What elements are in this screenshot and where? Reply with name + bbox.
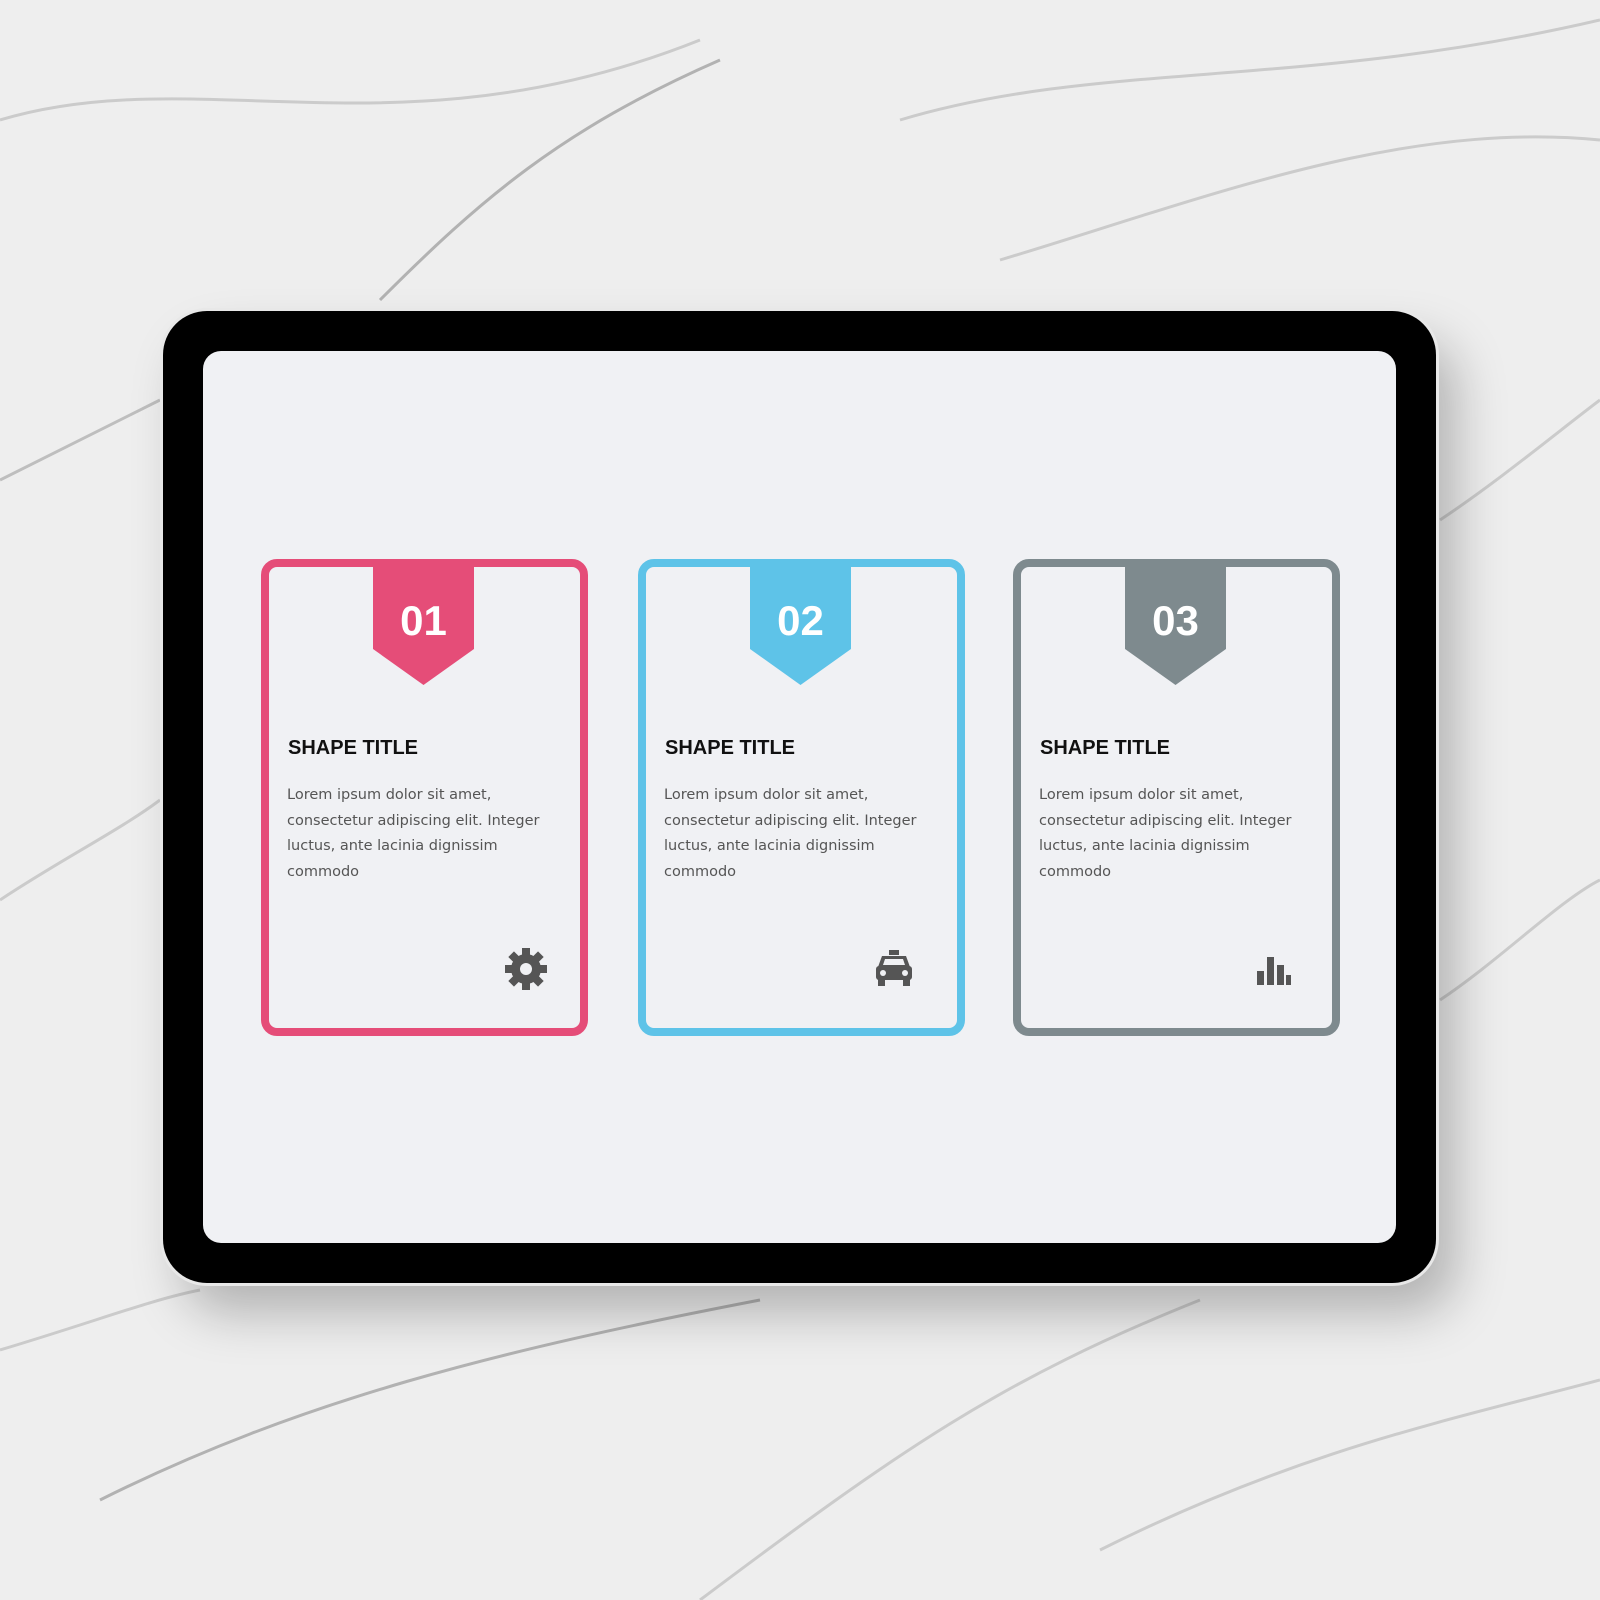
badge 01: 01 [400, 597, 447, 644]
badge 02: 02 [777, 597, 824, 644]
badge 01 [373, 567, 474, 685]
tablet [163, 311, 1436, 1283]
heading: SHAPE TITLE [288, 737, 418, 759]
text block: Lorem ipsum dolor sit amet, consectetur adipiscing elit. Integer luctus, ante lacinia dignissim commodo [287, 787, 539, 880]
panel: card 03 [1013, 559, 1340, 1036]
badge 03: 03 [1152, 597, 1199, 644]
heading: SHAPE TITLE [1040, 737, 1170, 759]
panel: card 01 [261, 559, 588, 1036]
icon: taxi [876, 950, 912, 986]
heading: SHAPE TITLE [665, 737, 795, 759]
icon: bar chart [1257, 957, 1291, 985]
panel: card 02 [638, 559, 965, 1036]
badge 02 [750, 567, 851, 685]
text block: Lorem ipsum dolor sit amet, consectetur adipiscing elit. Integer luctus, ante lacinia dignissim commodo [664, 787, 916, 880]
icon: gear [505, 948, 547, 990]
text block: Lorem ipsum dolor sit amet, consectetur adipiscing elit. Integer luctus, ante lacinia dignissim commodo [1039, 787, 1291, 880]
badge 03 [1125, 567, 1226, 685]
